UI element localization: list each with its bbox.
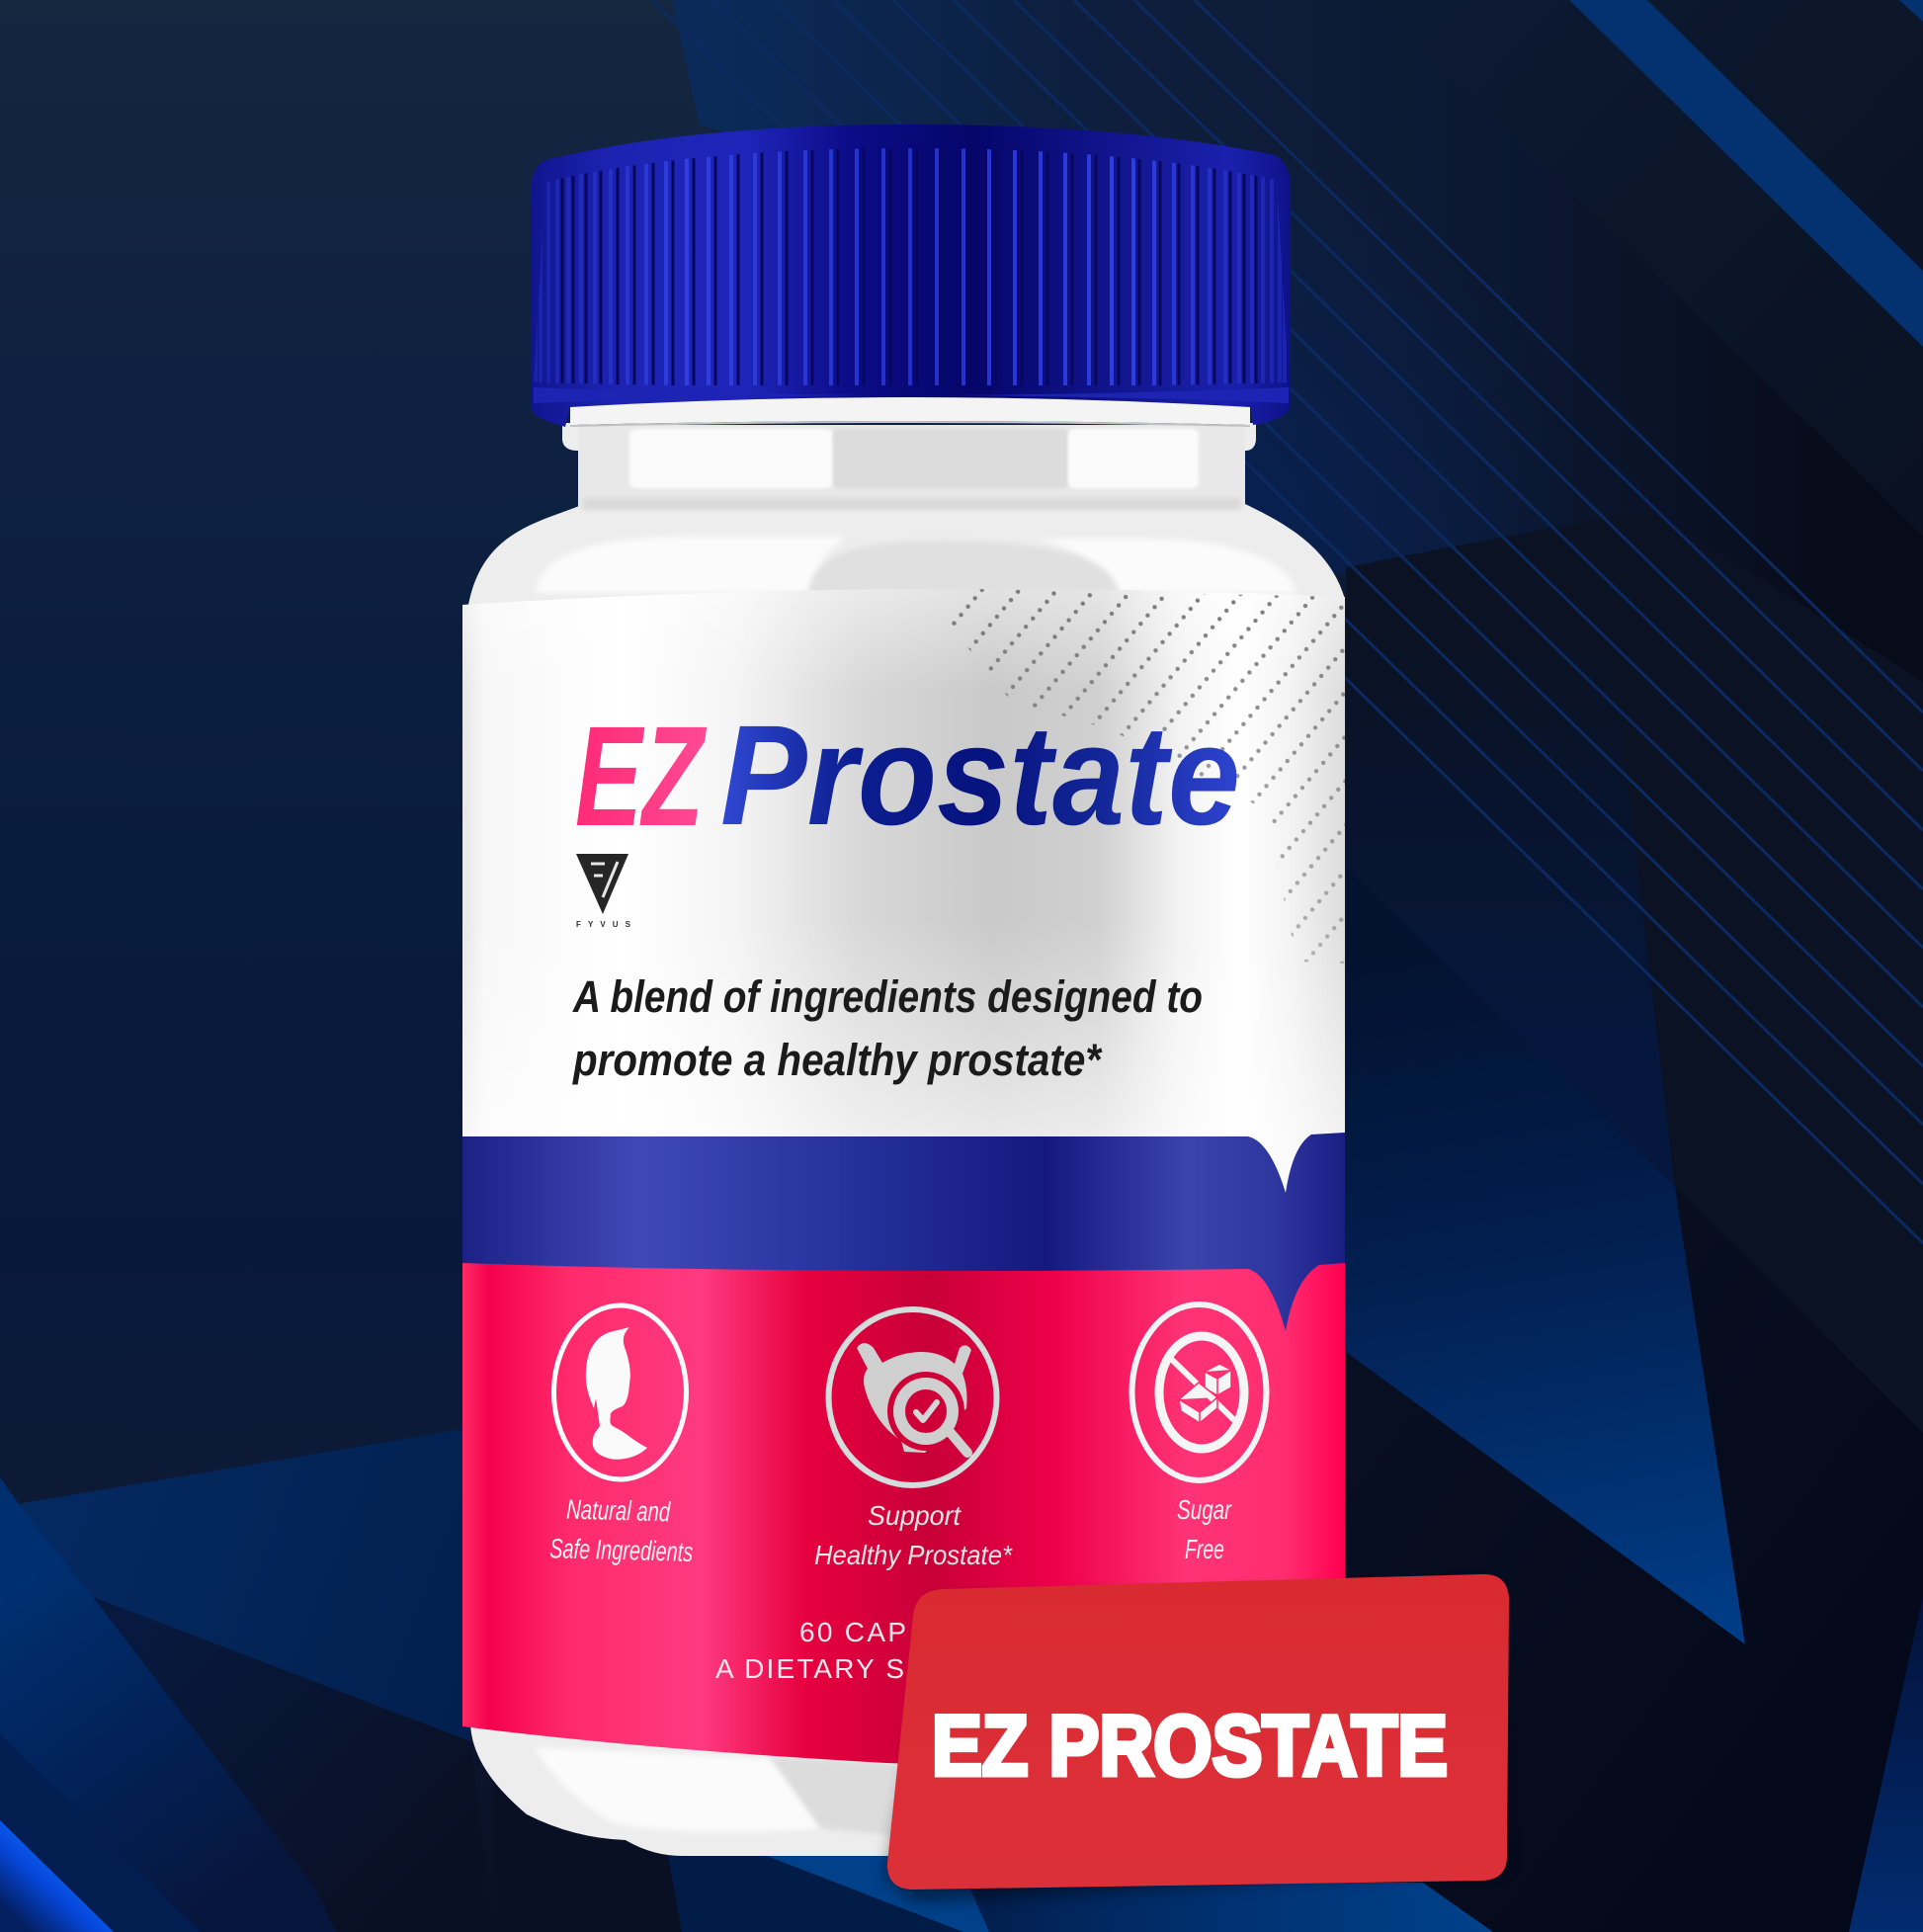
tagline [572,971,1203,1085]
corner band [1899,0,1923,22]
label [814,1500,1013,1570]
bottle neck [562,392,1256,510]
bottle [462,125,1354,1856]
bottle shoulder [468,504,1345,605]
label: Safe Ingredients [549,1533,694,1567]
capsule count text: A DIETARY S [715,1653,904,1684]
bottle base [470,1720,919,1856]
label: Natural and [566,1494,672,1527]
label: Support [868,1500,962,1531]
brand logo [576,854,631,929]
tagline: promote a healthy prostate* [572,1035,1103,1085]
halftone dots [934,589,1345,964]
card text: EZ PROSTATE [932,1699,1448,1794]
label [549,1494,694,1567]
icon: plant [553,1305,686,1479]
label: white [462,589,1345,1201]
product title: Prostate [720,696,1240,855]
icon: prostate with magnifier [828,1309,996,1485]
capsule count text [715,1617,906,1684]
diagonal band [1569,0,1923,347]
tagline: A blend of ingredients designed to [572,971,1203,1022]
label: blue band [462,1133,1345,1339]
diagonal line pattern [652,0,1923,1243]
capsule count text: 60 CAP [799,1617,906,1647]
label: Healthy Prostate* [814,1540,1013,1570]
label: Sugar [1177,1494,1232,1525]
icon: no sugar [1132,1304,1267,1480]
bottle cap [531,125,1291,427]
feature: natural and safe ingredients [549,1305,694,1567]
label [1177,1494,1232,1564]
label: pink panel [462,1263,1345,1766]
feature: support healthy prostate [814,1309,1013,1570]
brand logo: FYVUS [576,920,631,929]
label: Free [1185,1534,1224,1564]
red product card [887,1574,1509,1890]
card shadow [884,1586,1507,1902]
feature: sugar free [1132,1304,1267,1564]
product title: EZ [575,697,708,856]
